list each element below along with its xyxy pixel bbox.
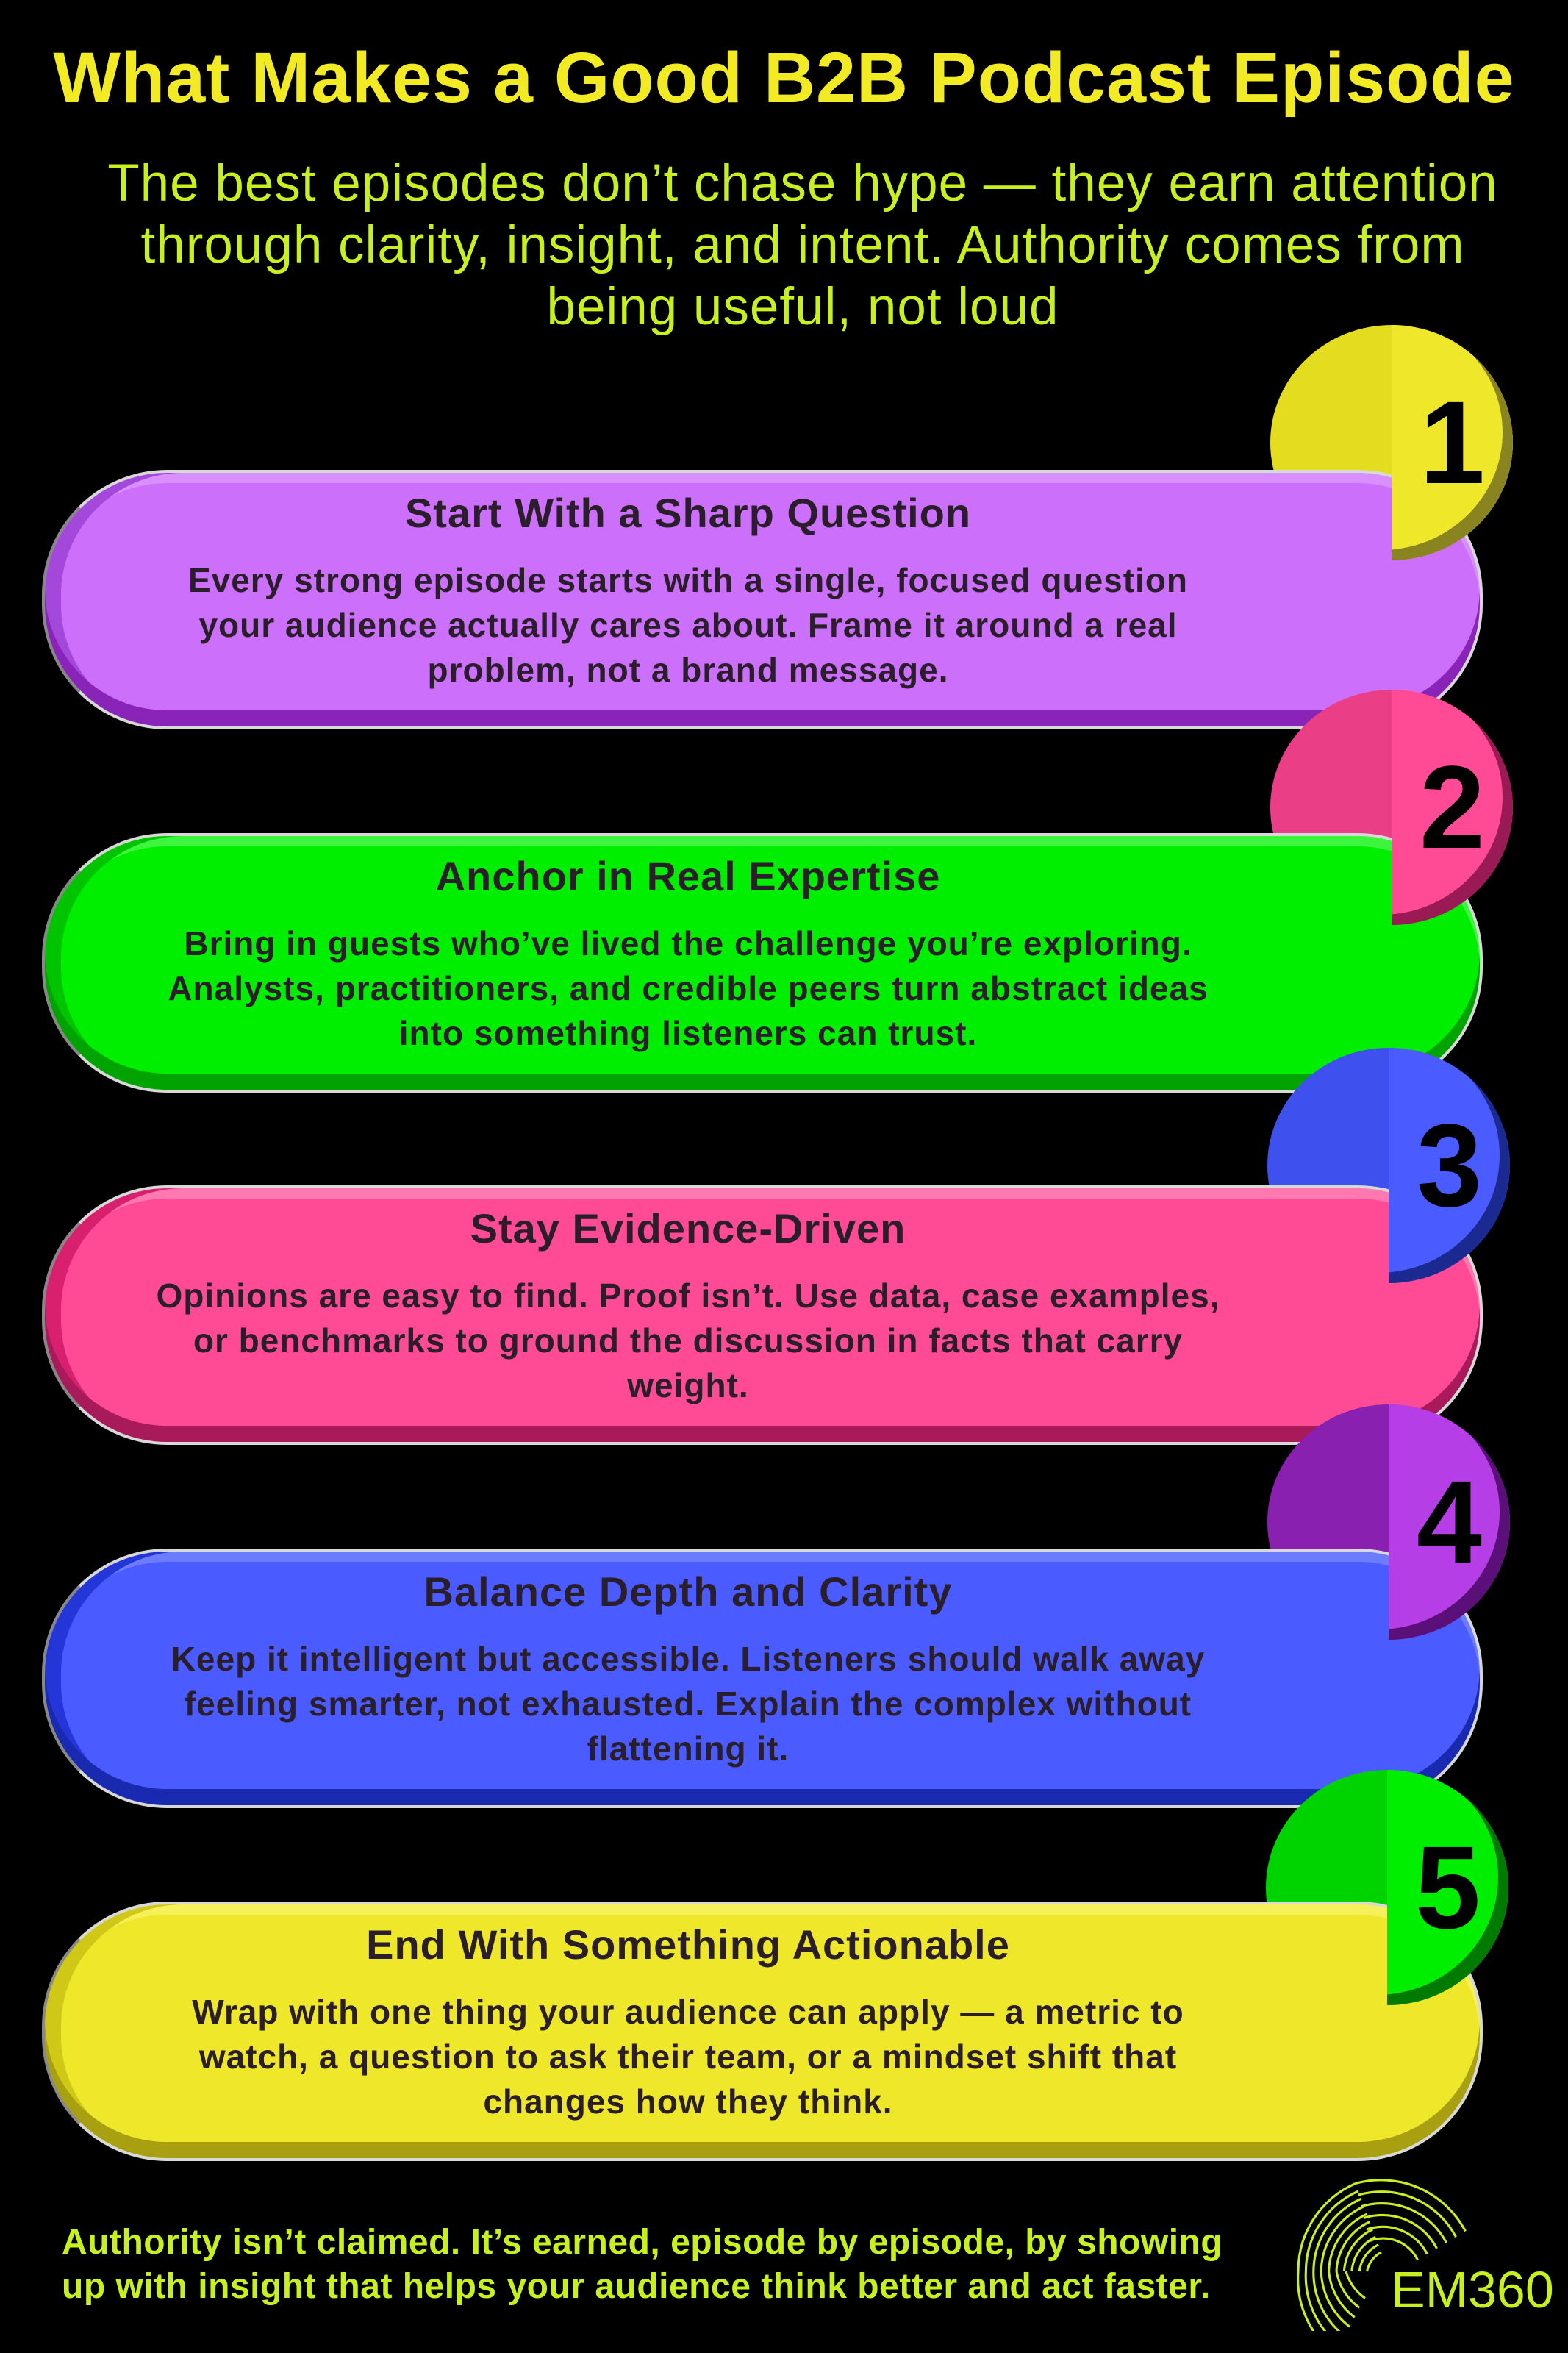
panel: step 5 bbox=[42, 1902, 1483, 2161]
number badge 3: 3 bbox=[1417, 1099, 1482, 1231]
panel: step 3 bbox=[42, 1185, 1483, 1445]
text 2 bbox=[168, 924, 1209, 1052]
number badge 2 bbox=[1392, 690, 1513, 925]
text 4: flattening it. bbox=[587, 1729, 789, 1768]
circle back 1 bbox=[1270, 325, 1513, 560]
text 3: weight. bbox=[627, 1366, 749, 1404]
text 2: Bring in guests who’ve lived the challenge you’re exploring. bbox=[184, 924, 1192, 963]
footer text: up with insight that helps your audience think better and act faster. bbox=[62, 2267, 1211, 2306]
text 1: problem, not a brand message. bbox=[428, 651, 948, 689]
text 1: your audience actually cares about. Frame it around a real bbox=[198, 606, 1178, 644]
number badge 3 bbox=[1389, 1048, 1510, 1283]
heading 5: End With Something Actionable bbox=[366, 1921, 1010, 1968]
number badge 1 bbox=[1392, 325, 1513, 560]
circle back 5 bbox=[1266, 1770, 1508, 2005]
number badge 2: 2 bbox=[1420, 741, 1485, 873]
number badge 4 bbox=[1389, 1404, 1510, 1640]
heading 1: Start With a Sharp Question bbox=[405, 490, 971, 536]
text 4 bbox=[171, 1640, 1205, 1768]
panel: step 2 bbox=[42, 833, 1483, 1093]
text 3 bbox=[156, 1277, 1220, 1404]
subtitle bbox=[107, 154, 1498, 336]
heading 2: Anchor in Real Expertise bbox=[436, 853, 940, 899]
text 4: feeling smarter, not exhausted. Explain the complex without bbox=[185, 1685, 1192, 1723]
panel: step 4 bbox=[42, 1549, 1483, 1808]
number badge 1: 1 bbox=[1420, 376, 1485, 508]
number badge 5: 5 bbox=[1415, 1821, 1481, 1953]
subtitle: through clarity, insight, and intent. Authority comes from bbox=[141, 216, 1464, 274]
circle back 2 bbox=[1270, 690, 1513, 925]
number badge 4: 4 bbox=[1417, 1456, 1482, 1588]
title: What Makes a Good B2B Podcast Episode bbox=[53, 38, 1515, 118]
text 2: into something listeners can trust. bbox=[399, 1014, 977, 1052]
heading 3: Stay Evidence-Driven bbox=[470, 1205, 906, 1252]
text 5 bbox=[192, 1993, 1184, 2121]
text 1 bbox=[188, 561, 1188, 689]
text 5: Wrap with one thing your audience can apply — a metric to bbox=[192, 1993, 1184, 2031]
number badge 5 bbox=[1387, 1770, 1508, 2005]
text 3: or benchmarks to ground the discussion in facts that carry bbox=[193, 1321, 1183, 1360]
text 2: Analysts, practitioners, and credible peers turn abstract ideas bbox=[168, 969, 1209, 1007]
footer text bbox=[62, 2223, 1222, 2306]
subtitle: The best episodes don’t chase hype — they earn attention bbox=[107, 154, 1498, 213]
footer text: Authority isn’t claimed. It’s earned, episode by episode, by showing bbox=[62, 2223, 1222, 2262]
logo: EM360: EM360 bbox=[1391, 2261, 1554, 2318]
text 5: changes how they think. bbox=[483, 2082, 893, 2121]
circle back 4 bbox=[1267, 1404, 1510, 1640]
text 5: watch, a question to ask their team, or a mindset shift that bbox=[199, 2038, 1177, 2076]
logo: EM360 bbox=[1297, 2179, 1554, 2331]
panel: step 1 bbox=[42, 470, 1483, 729]
subtitle: being useful, not loud bbox=[546, 278, 1059, 336]
text 4: Keep it intelligent but accessible. Listeners should walk away bbox=[171, 1640, 1205, 1678]
text 3: Opinions are easy to find. Proof isn’t. Use data, case examples, bbox=[156, 1277, 1220, 1315]
text 1: Every strong episode starts with a single, focused question bbox=[188, 561, 1188, 599]
circle back 3 bbox=[1267, 1048, 1510, 1283]
heading 4: Balance Depth and Clarity bbox=[424, 1568, 952, 1615]
